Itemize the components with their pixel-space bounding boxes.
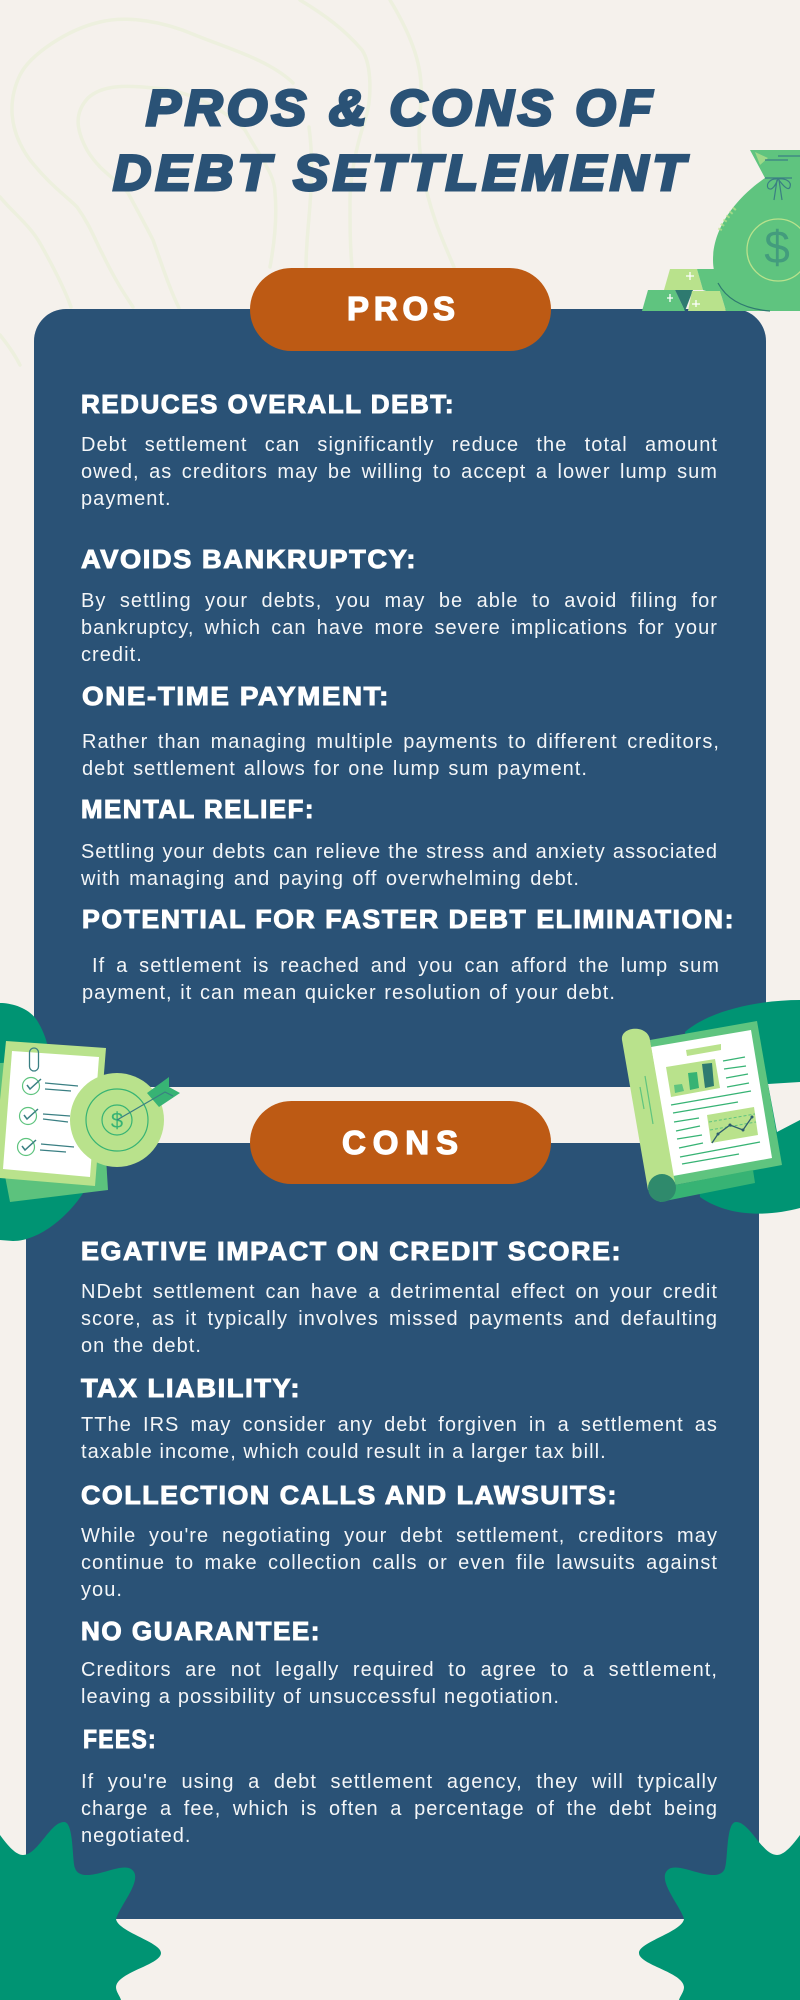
text: tax liability: TThe IRS may consider any debt forgiven in a settlement as: [81, 1414, 718, 1436]
panel: pros: [34, 309, 766, 1087]
text: one-time payment: Rather than managing multiple payments to different creditors,: [82, 731, 720, 753]
decoration: bottom left leaf: [0, 1822, 161, 2000]
text: reduces overall debt: payment.: [81, 488, 172, 510]
text: potential for faster debt elimination: If a settlement is reached and you can afford the lump sum: [92, 955, 720, 977]
text: potential for faster debt elimination: payment, it can mean quicker resolution of your debt.: [82, 982, 616, 1004]
text: fees: negotiated.: [81, 1825, 192, 1847]
heading: negative impact on credit score: EGATIVE IMPACT ON CREDIT SCORE:: [81, 1236, 622, 1266]
heading: potential for faster debt elimination: POTENTIAL FOR FASTER DEBT ELIMINATION:: [82, 904, 735, 934]
text: no guarantee: Creditors are not legally required to agree to a settlement,: [81, 1659, 718, 1681]
icon: money bag and gold bars: $: [764, 221, 790, 273]
heading: tax liability: TAX LIABILITY:: [81, 1373, 301, 1403]
text: avoids bankruptcy: [81, 590, 718, 666]
heading: avoids bankruptcy: AVOIDS BANKRUPTCY:: [81, 544, 417, 574]
pill: cons: [250, 1101, 551, 1184]
text: potential for faster debt elimination: [82, 955, 720, 1004]
text: reduces overall debt: Debt settlement can significantly reduce the total amount: [81, 434, 718, 456]
text: avoids bankruptcy: credit.: [81, 644, 143, 666]
pill label: cons: CONS: [342, 1124, 458, 1161]
text: no guarantee: leaving a possibility of unsuccessful negotiation.: [81, 1686, 560, 1708]
text: reduces overall debt: owed, as creditors may be willing to accept a lower lump sum: [81, 461, 718, 483]
text: no guarantee: [81, 1659, 718, 1708]
heading: fees: FEES:: [83, 1724, 157, 1754]
text: negative impact on credit score: NDebt settlement can have a detrimental effect on your credit: [81, 1281, 718, 1303]
text: avoids bankruptcy: By settling your debts, you may be able to avoid filing for: [81, 590, 718, 612]
text: one-time payment: debt settlement allows for one lump sum payment.: [82, 758, 588, 780]
text: avoids bankruptcy: bankruptcy, which can have more severe implications for your: [81, 617, 718, 639]
title: PROS & CONS OF: [146, 80, 656, 136]
icon: money bag and gold bars: [642, 150, 800, 312]
pill label: pros: PROS: [347, 290, 455, 327]
text: mental relief: Settling your debts can relieve the stress and anxiety associated: [81, 841, 718, 863]
text: negative impact on credit score: on the debt.: [81, 1335, 202, 1357]
text: mental relief: with managing and paying off overwhelming debt.: [81, 868, 580, 890]
pill: pros: [250, 268, 551, 351]
icon: checklist and target: [0, 1003, 180, 1241]
text: collection calls and lawsuits: [81, 1525, 718, 1601]
heading: collection calls and lawsuits: COLLECTION CALLS AND LAWSUITS:: [81, 1480, 618, 1510]
text: tax liability: taxable income, which could result in a larger tax bill.: [81, 1441, 607, 1463]
text: negative impact on credit score: [81, 1281, 718, 1357]
heading: mental relief: MENTAL RELIEF:: [81, 794, 315, 824]
icon: checklist and target: $: [111, 1108, 123, 1133]
title: DEBT SETTLEMENT: [113, 145, 689, 201]
text: fees: charge a fee, which is often a percentage of the debt being: [81, 1798, 718, 1820]
heading: reduces overall debt: REDUCES OVERALL DEBT:: [81, 389, 455, 419]
text: fees: [81, 1771, 718, 1847]
icon: report with charts: [622, 1000, 800, 1214]
text: collection calls and lawsuits: you.: [81, 1579, 123, 1601]
text: tax liability: [81, 1414, 718, 1463]
text: reduces overall debt: [81, 434, 718, 510]
text: mental relief: [81, 841, 718, 890]
heading: one-time payment: ONE-TIME PAYMENT:: [82, 681, 390, 711]
text: fees: If you're using a debt settlement agency, they will typically: [81, 1771, 718, 1793]
background contour lines: [0, 0, 456, 367]
decoration: bottom right leaf: [639, 1822, 800, 2000]
text: negative impact on credit score: score, as it typically involves missed payments and defaulting: [81, 1308, 718, 1330]
heading: no guarantee: NO GUARANTEE:: [81, 1616, 321, 1646]
text: collection calls and lawsuits: continue to make collection calls or even file lawsuits against: [81, 1552, 718, 1574]
text: collection calls and lawsuits: While you're negotiating your debt settlement, creditors may: [81, 1525, 718, 1547]
text: one-time payment: [82, 731, 720, 780]
title: [112, 80, 690, 201]
panel: cons: [26, 1143, 759, 1919]
